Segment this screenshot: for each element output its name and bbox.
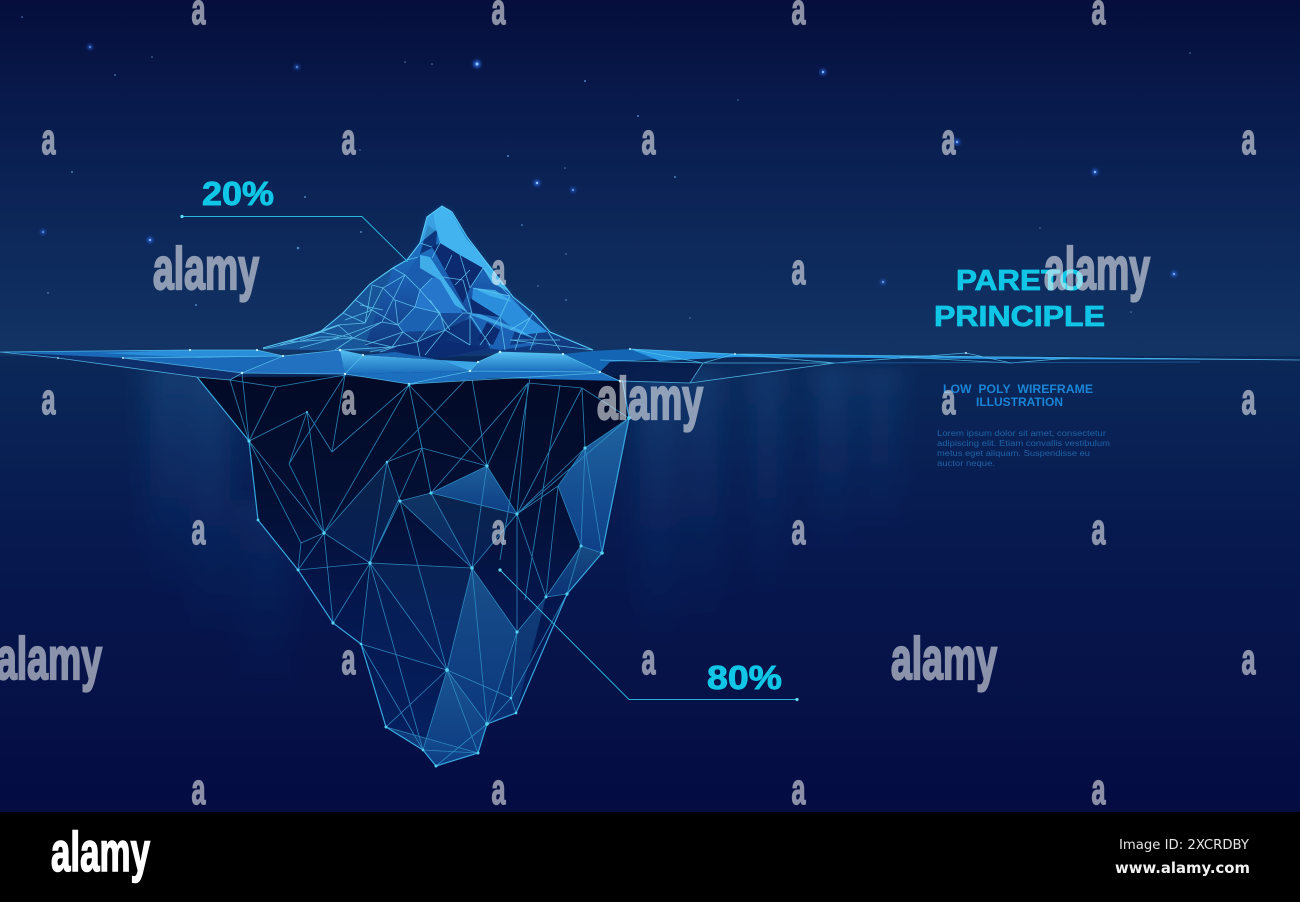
tip outline [263,206,593,350]
large watermark words: alamy [153,236,259,302]
footer logo: alamy [51,820,150,883]
small watermark letters: a [1092,505,1106,554]
wireframe lines underwater [230,372,629,766]
title text block [934,265,1110,468]
large watermark words: alamy [0,626,102,692]
tip body [365,206,593,358]
small watermark letters: a [942,115,956,164]
small watermark letters: a [792,245,806,294]
small watermark letters: a [1242,635,1256,684]
iceberg tip above water [263,206,593,358]
body copy: auctor neque. [937,458,995,468]
mid-tone facets on tip [398,257,548,350]
iceberg [0,206,1300,768]
stars [21,16,1191,319]
website: www.alamy.com [1115,859,1250,877]
small watermark letters: a [642,115,656,164]
bright outline of submerged body [197,377,629,766]
leader dot 20% [180,215,184,218]
small watermark letters: a [792,765,806,814]
underwater light rays [150,365,892,700]
large watermark words: alamy [1044,236,1150,302]
wireframe nodes underwater [247,384,631,768]
value 20%: 20% [202,175,274,212]
large watermark words [0,236,1150,692]
small watermark letters: a [1242,375,1256,424]
sea background [0,356,1300,813]
large watermark words: alamy [891,626,997,692]
dark facets on tip [392,225,535,358]
leader dots 80% [498,568,799,701]
water surface sheet [0,348,1300,385]
body copy: metus eget aliquam. Suspendisse eu [937,448,1090,458]
lit facets underwater [324,418,629,766]
surface nodes [57,348,967,385]
value 80%: 80% [707,659,782,696]
body copy: Lorem ipsum dolor sit amet, consectetur [937,428,1106,438]
small watermark letters: a [1092,765,1106,814]
small watermark letters: a [492,245,506,294]
image id: Image ID: 2XCRDBY [1119,837,1250,853]
subheading: LOW POLY WIREFRAME [943,384,1093,396]
leader line 80% [500,570,797,700]
bright facets on tip [420,206,538,340]
heading: PRINCIPLE [934,301,1105,333]
small watermark letters: a [42,375,56,424]
small watermark letters: a [492,765,506,814]
submerged iceberg body [197,372,629,766]
left translucent slope [263,268,420,352]
tip glow [393,206,593,355]
small watermark letters: a [192,765,206,814]
heading: PARETO [956,265,1084,297]
small watermark letters: a [942,375,956,424]
large watermark words: alamy [597,366,703,432]
small watermark letters: a [342,375,356,424]
small watermark letters: a [492,505,506,554]
body copy: adipiscing elit. Etiam convallis vestibulum [937,438,1110,448]
leader line 20% [182,216,408,262]
surface wire lines [0,349,1300,384]
small watermark letters: a [1242,115,1256,164]
small watermark letters: a [642,635,656,684]
small watermark letters: a [192,505,206,554]
wireframe lines on tip [263,243,593,357]
callout: 80% [498,568,799,701]
dim dashed sea line [835,362,1200,363]
sky background [0,0,1300,356]
small watermark letters: a [342,115,356,164]
small watermark letters: a [792,505,806,554]
footer bar [0,812,1300,902]
callout: 20% [180,175,408,262]
small watermark letters: a [342,635,356,684]
subheading: ILLUSTRATION [976,397,1063,409]
small watermark letters: a [42,115,56,164]
